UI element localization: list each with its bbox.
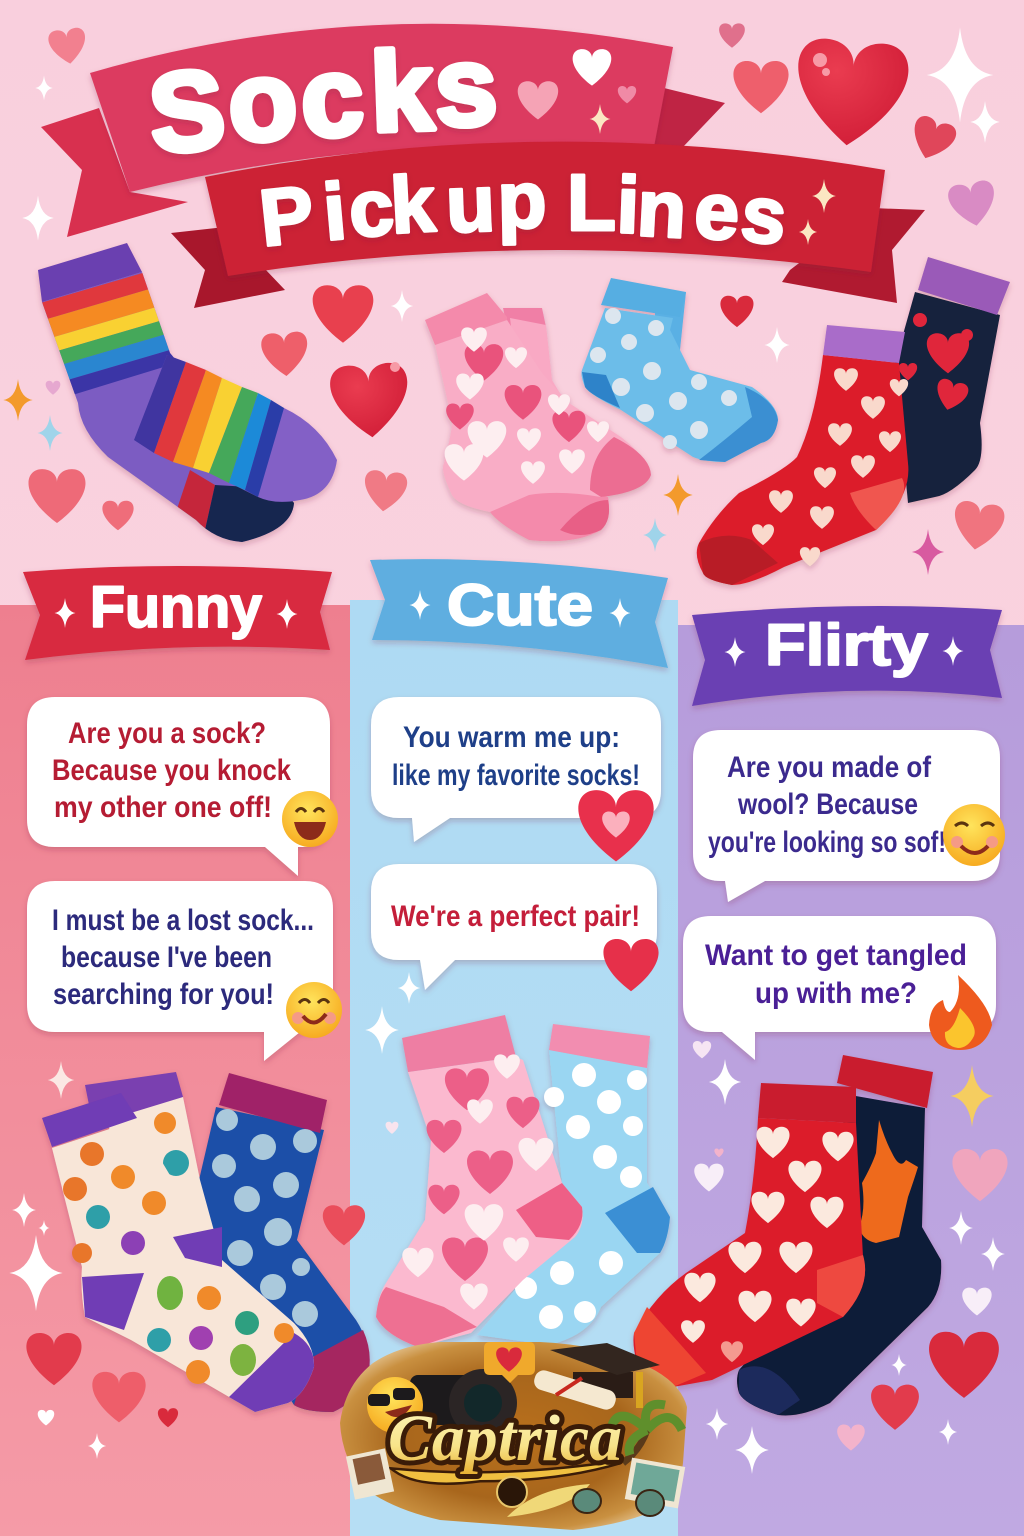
panel: cute column background <box>350 600 678 1536</box>
decorative hearts and sparkles, top area <box>3 23 1006 575</box>
icon: camera <box>410 1369 517 1437</box>
pink sock <box>425 293 651 541</box>
speech bubble: lost sock: because I've been <box>61 941 272 974</box>
logo wordmark: Captrica <box>388 1402 622 1475</box>
pink hearts sock <box>376 1015 583 1347</box>
heading: Socks: Socks <box>144 23 499 177</box>
sock pair: red hearts and navy <box>697 257 1010 585</box>
title ornaments <box>518 49 836 245</box>
icon: palm tree <box>612 1404 682 1463</box>
logo: Captrica <box>340 1342 687 1530</box>
sock pair: rainbow <box>30 243 337 560</box>
speech bubble: perfect pair <box>371 864 659 991</box>
speech bubble: sock knock: my other one off! <box>54 791 272 824</box>
banner: Funny <box>23 566 332 660</box>
speech bubble: made of wool <box>693 730 1005 902</box>
icon: red heart <box>603 939 659 991</box>
sock pair: red hearts and flame, flirty column <box>633 1055 941 1416</box>
icon: sunglasses emoji <box>367 1377 423 1433</box>
front cream sock <box>42 1093 314 1412</box>
icon: laughing emoji <box>282 791 338 847</box>
ribbon tails <box>41 88 925 308</box>
panel: flirty column background <box>678 625 1024 1536</box>
speech bubble: lost sock <box>27 881 342 1061</box>
panel: funny column background <box>0 605 350 1536</box>
red hearts sock <box>633 1083 865 1387</box>
banner: Cute <box>370 559 668 668</box>
speech bubble: get tangled: up with me? <box>755 977 917 1010</box>
banner: Flirty: Flirty <box>765 613 928 678</box>
icon: fire emoji <box>929 975 992 1050</box>
back cream sock <box>85 1072 222 1260</box>
sock pair: hearts and dots, cute column <box>376 1015 670 1347</box>
blue sock <box>581 278 778 462</box>
logo swoosh <box>395 1462 620 1482</box>
speech bubble: warm me up: like my favorite socks! <box>392 759 640 792</box>
blue dotted sock <box>477 1024 670 1345</box>
speech bubble: made of wool: wool? Because <box>737 788 918 821</box>
red sock <box>697 325 908 585</box>
speech bubble: lost sock: searching for you! <box>53 978 274 1011</box>
speech bubble: perfect pair: We're a perfect pair! <box>391 900 640 933</box>
icon: glossy heart <box>578 790 654 861</box>
banner: Funny: Funny <box>90 575 262 640</box>
speech bubble: get tangled <box>683 916 996 1060</box>
speech bubble: sock knock: Are you a sock? <box>68 717 266 750</box>
icon: graduation cap and scroll <box>532 1343 660 1412</box>
ribbon: upper <box>90 24 673 192</box>
icon: smiling emoji <box>286 982 342 1038</box>
icon: flame pattern <box>859 1120 918 1243</box>
logo base <box>340 1342 687 1530</box>
icon: photos, aperture, feather and sunglasses <box>346 1448 685 1517</box>
decorative hearts and sparkles, lower area <box>9 972 1008 1474</box>
icon: heart speech bubble <box>484 1342 535 1383</box>
speech bubble: made of wool: Are you made of <box>727 751 932 784</box>
speech bubble: made of wool: you're looking so sof! <box>708 826 946 859</box>
speech bubble: get tangled: Want to get tangled <box>705 939 967 972</box>
speech bubble: sock knock <box>27 697 338 876</box>
speech bubble: sock knock: Because you knock <box>52 754 291 787</box>
blue dotted sock <box>199 1073 370 1412</box>
banner: Flirty <box>692 606 1002 706</box>
ribbon: lower <box>205 142 885 276</box>
heading: Pickup Lines: Pickup Lines <box>255 155 791 263</box>
navy flame sock <box>737 1055 941 1416</box>
title banner <box>41 23 925 308</box>
icon: blushing emoji <box>943 804 1005 866</box>
sock pair: pink hearts and blue dots <box>425 278 778 541</box>
speech bubble: warm me up <box>371 697 661 861</box>
banner: Cute: Cute <box>447 573 593 638</box>
speech bubble: lost sock: I must be a lost sock... <box>52 904 314 937</box>
speech bubble: warm me up: You warm me up: <box>403 721 620 754</box>
sock pair: polka dots, funny column <box>42 1072 370 1412</box>
navy sock <box>895 257 1010 503</box>
